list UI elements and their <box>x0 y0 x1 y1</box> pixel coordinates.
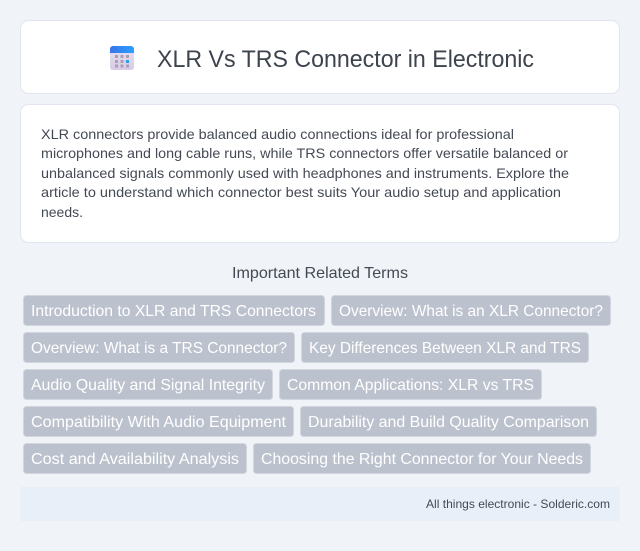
panel: header <box>20 20 620 94</box>
tag: key differences <box>302 332 588 362</box>
description text <box>41 126 569 220</box>
tag: durability: Durability and Build Quality Comparison <box>308 414 589 431</box>
tag: overview xlr: Overview: What is an XLR Connector? <box>339 303 603 320</box>
panel: description <box>20 104 620 242</box>
tag: choosing <box>254 444 590 474</box>
icon: calendar <box>110 46 134 70</box>
tag: audio quality: Audio Quality and Signal Integrity <box>31 377 265 394</box>
tag: durability <box>300 406 596 436</box>
tag: audio quality <box>24 370 272 400</box>
tag: compatibility <box>24 406 294 436</box>
tag: compatibility: Compatibility With Audio Equipment <box>31 414 287 431</box>
footer text: All things electronic - Solderic.com <box>426 497 610 511</box>
description text: article to understand which connector best suits Your audio setup and application <box>41 184 561 200</box>
tag: overview trs <box>24 332 294 362</box>
tag: introduction: Introduction to XLR and TRS Connectors <box>31 303 316 320</box>
title: XLR Vs TRS Connector in Electronic <box>157 46 534 73</box>
tag: overview xlr <box>332 296 610 326</box>
tag: common applications: Common Applications: XLR vs TRS <box>287 377 534 394</box>
tag: cost <box>24 444 246 474</box>
panel: related term tags <box>24 296 610 474</box>
tag: cost: Cost and Availability Analysis <box>31 451 239 468</box>
description text: XLR connectors provide balanced audio connections ideal for professional <box>41 126 514 142</box>
tag: choosing: Choosing the Right Connector for Your Needs <box>261 451 583 468</box>
footer <box>20 487 620 521</box>
tag: key differences: Key Differences Between XLR and TRS <box>309 340 581 357</box>
heading: important related terms: Important Related Terms <box>232 265 408 282</box>
tag: introduction <box>24 296 324 326</box>
description text: unbalanced signals commonly used with headphones and instruments. Explore the <box>41 165 569 181</box>
description text: needs. <box>41 204 83 220</box>
tag: common applications <box>280 370 542 400</box>
description text: microphones and long cable runs, while TRS connectors offer versatile balanced or <box>41 145 568 161</box>
tag: overview trs: Overview: What is a TRS Connector? <box>31 340 287 357</box>
